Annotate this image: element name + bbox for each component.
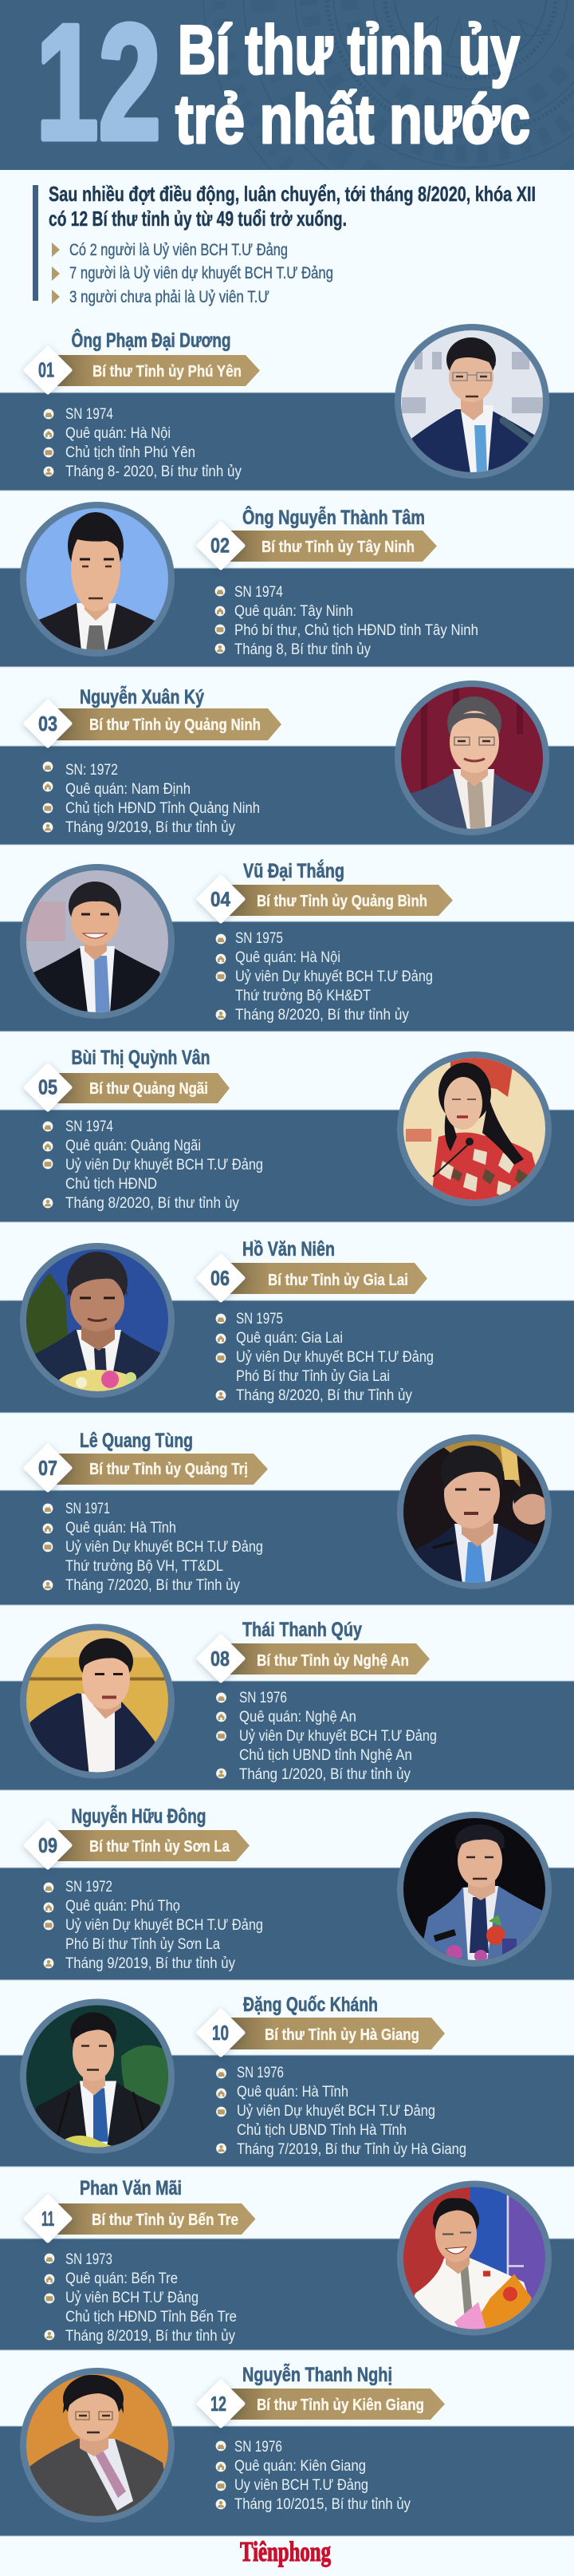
section 05 [0,1047,574,1222]
ribbon: Bí thư Quảng Ngãi [89,1080,208,1098]
section 06 [0,1238,574,1413]
name: Ông Phạm Đại Dương [72,328,231,352]
details list: Chủ tịch HĐND Tỉnh Quảng Ninh [65,800,260,817]
details list: Quê quán: Hà Nội [65,425,171,442]
name: Bùi Thị Quỳnh Vân [72,1047,210,1069]
details list: Thứ trưởng Bộ KH&ĐT [235,988,371,1004]
details list: Phó bí thư, Chủ tịch HĐND tỉnh Tây Ninh [234,622,478,639]
details list: Chủ tịch HĐND [65,1176,157,1193]
portrait 02 [20,502,175,657]
details list: Uỷ viên BCH T.Ư Đảng [65,2290,199,2306]
details list: SN: 1972 [65,762,118,779]
number badge: 05 [38,1075,57,1099]
details list: Tháng 1/2020, Bí thư tỉnh ủy [239,1766,411,1783]
details list [43,1118,263,1212]
details list: Tháng 8- 2020, Bí thư tỉnh ủy [65,464,242,480]
number badge: 03 [38,712,57,736]
details list: SN 1974 [234,584,283,601]
details list: Chủ tịch UBND tỉnh Nghệ An [239,1747,412,1764]
details list: Uỷ viên Dự khuyết BCH T.Ư Đảng [237,2103,435,2120]
details list: Thứ trưởng Bộ VH, TT&DL [65,1558,223,1575]
details list: Tháng 7/2020, Bí thư Tỉnh ủy [65,1577,240,1594]
details list [216,1311,434,1404]
ribbon: Bí thư Tỉnh ủy Quảng Bình [257,893,427,910]
number badge [26,1065,70,1110]
details list: Uỷ viên Dự khuyết BCH T.Ư Đảng [65,1539,263,1556]
name: Vũ Đại Thắng [243,858,344,882]
name: Phan Văn Mãi [80,2177,182,2199]
ribbon [226,1263,427,1294]
details list: Uỷ viên Dự khuyết BCH T.Ư Đảng [65,1917,263,1934]
intro bullet list: Có 2 người là Uỷ viên BCH T.Ư Đảng [69,240,288,259]
details list: SN 1973 [65,2251,112,2268]
details list [216,930,433,1024]
details list [44,1879,263,1972]
details list: Tháng 8/2020, Bí thư tỉnh ủy [65,1195,239,1212]
details list: SN 1976 [234,2439,282,2456]
number badge [199,877,243,921]
ribbon: Bí thư Tỉnh ủy Kiên Giang [257,2397,424,2414]
details list [43,1501,263,1594]
ribbon [226,2389,445,2420]
ribbon [53,708,281,740]
details list: Uy viên BCH T.Ư Đảng [234,2477,368,2494]
details list: SN 1976 [237,2065,284,2081]
portrait 01 [395,324,549,479]
number badge: 01 [38,357,54,381]
number badge [199,1256,243,1300]
portrait 07 [397,1434,552,1589]
details list: Phó Bí thư Tỉnh ủy Gia Lai [236,1368,390,1385]
details list: Quê quán: Tây Ninh [234,603,353,620]
portrait 08 [20,1624,175,1779]
details list: Tháng 10/2015, Bí thư tỉnh ủy [234,2496,411,2513]
number badge: 07 [38,1456,57,1480]
portrait 09 [397,1812,552,1967]
section 04 [0,858,574,1032]
details list [44,406,242,480]
ribbon: Bí thư Tỉnh ủy Tây Ninh [261,538,415,556]
number badge: 04 [210,887,230,911]
name: Đặng Quốc Khánh [243,1994,378,2016]
intro bullet list [52,240,333,306]
name: Thái Thanh Qúy [242,1619,362,1641]
section 08 [0,1619,574,1790]
number badge [26,1446,70,1490]
number badge [26,348,70,393]
details list: SN 1975 [235,930,283,947]
ribbon: Bí thư Tỉnh ủy Phú Yên [92,363,242,381]
details list: Tháng 8, Bí thư tỉnh ủy [234,641,371,658]
details list: Tháng 9/2019, Bí thư tỉnh ủy [65,819,235,836]
details list: Uỷ viên Dự khuyết BCH T.Ư Đảng [235,968,433,985]
details list: Quê quán: Quảng Ngãi [65,1138,201,1154]
details list: Quê quán: Nghệ An [239,1709,356,1726]
details list [216,1690,437,1783]
number badge [26,1823,70,1868]
ribbon: Bí thư Tỉnh ủy Bến Tre [92,2211,238,2229]
intro bullet list: 7 người là Uỷ viên dự khuyết BCH T.Ư Đảng [69,263,333,282]
logo: Tiền Phong: Tiênphong [240,2536,331,2567]
section 03 [0,680,574,845]
number badge: 12 [210,2392,226,2416]
number badge: 06 [210,1266,230,1290]
details list [216,2439,411,2513]
section 12 [0,2362,574,2536]
portrait 03 [395,680,549,835]
ribbon: Bí thư Tỉnh ủy Hà Giang [265,2026,419,2044]
details list [43,762,260,836]
portrait 12 [20,2368,175,2523]
name: Nguyễn Xuân Ký [80,684,204,708]
details list [215,584,478,658]
details list: Quê quán: Hà Tĩnh [65,1520,176,1537]
name: Nguyễn Hữu Đông [72,1804,206,1828]
number badge [26,2196,70,2241]
intro lead text: có 12 Bí thư tỉnh ủy từ 49 tuổi trở xuống. [49,207,347,231]
ribbon: Bí thư Tỉnh ủy Sơn La [89,1838,230,1856]
details list: Tháng 8/2020, Bí thư tỉnh ủy [235,1007,409,1024]
number badge [199,523,243,568]
name: Hồ Văn Niên [242,1238,335,1260]
number badge: 09 [38,1833,57,1857]
number badge: 08 [210,1647,230,1671]
title text [175,12,530,158]
details list: Tháng 8/2020, Bí thư Tỉnh ủy [236,1387,412,1404]
details list: SN 1975 [236,1311,283,1327]
details list: Uỷ viên Dự khuyết BCH T.Ư Đảng [236,1349,434,1366]
details list: Quê quán: Hà Nội [235,949,340,966]
ribbon [53,1454,268,1485]
ribbon [226,885,453,916]
name: Ông Nguyễn Thành Tâm [242,505,425,529]
portrait 11 [397,2181,552,2336]
details list: Tháng 8/2019, Bí thư tỉnh ủy [65,2328,235,2345]
details list: Uỷ viên Dự khuyết BCH T.Ư Đảng [239,1728,437,1745]
section 02 [0,502,574,667]
details list: Quê quán: Phú Thọ [65,1898,180,1915]
ribbon [53,1073,230,1103]
ribbon [226,2018,445,2049]
details list [216,2065,466,2158]
number badge [26,701,70,746]
portrait 05 [397,1051,552,1206]
details list: Tháng 7/2019, Bí thư Tỉnh ủy Hà Giang [237,2141,466,2158]
details list: Quê quán: Hà Tĩnh [237,2084,348,2101]
details list: Tháng 9/2019, Bí thư tỉnh ủy [65,1955,235,1972]
section 11 [0,2177,574,2350]
section 07 [0,1430,574,1605]
ribbon [53,2203,255,2235]
details list [45,2251,237,2345]
details list: Uỷ viên Dự khuyết BCH T.Ư Đảng [65,1157,263,1174]
ribbon: Bí thư Tỉnh ủy Quảng Trị [89,1461,248,1478]
details list: Chủ tịch tỉnh Phú Yên [65,444,195,461]
number badge [199,1636,243,1681]
section 10 [0,1994,574,2167]
number badge [199,2010,243,2055]
details list: Quê quán: Nam Định [65,781,191,798]
details list: SN 1974 [65,1118,113,1135]
portrait 06 [20,1243,175,1398]
details list: Phó Bí thư Tỉnh ủy Sơn La [65,1936,220,1953]
details list: Chủ tịch HĐND Tỉnh Bến Tre [65,2309,237,2326]
details list: Quê quán: Gia Lai [236,1330,343,1347]
details list: SN 1974 [65,406,113,423]
ribbon: Bí thư Tỉnh ủy Gia Lai [268,1272,408,1289]
number badge: 02 [210,533,230,557]
details list: SN 1976 [239,1690,287,1706]
name: Nguyễn Thanh Nghị [242,2362,392,2386]
header panel [0,0,574,170]
intro lead text [49,182,536,231]
ribbon [226,1643,430,1675]
intro bullet list: 3 người chưa phải là Uỷ viên T.Ư [69,287,269,306]
number badge: 10 [212,2021,229,2045]
ribbon [53,1830,250,1861]
name: Lê Quang Tùng [80,1430,193,1452]
ribbon [226,531,437,562]
portrait 04 [20,864,175,1019]
section 09 [0,1804,574,1980]
details list: Quê quán: Kiên Giang [234,2458,366,2475]
details list: SN 1971 [65,1501,110,1517]
intro block [33,182,536,306]
number badge: 11 [41,2207,54,2231]
ribbon [53,355,260,386]
details list: SN 1972 [65,1879,112,1896]
ribbon: Bí thư Tỉnh ủy Nghệ An [257,1652,409,1670]
ribbon: Bí thư Tỉnh ủy Quảng Ninh [89,716,261,734]
section 01 [0,324,574,491]
portrait 10 [20,1999,175,2154]
details list: Chủ tịch UBND Tỉnh Hà Tĩnh [237,2122,407,2139]
details list: Quê quán: Bến Tre [65,2270,178,2287]
number badge [199,2381,243,2426]
